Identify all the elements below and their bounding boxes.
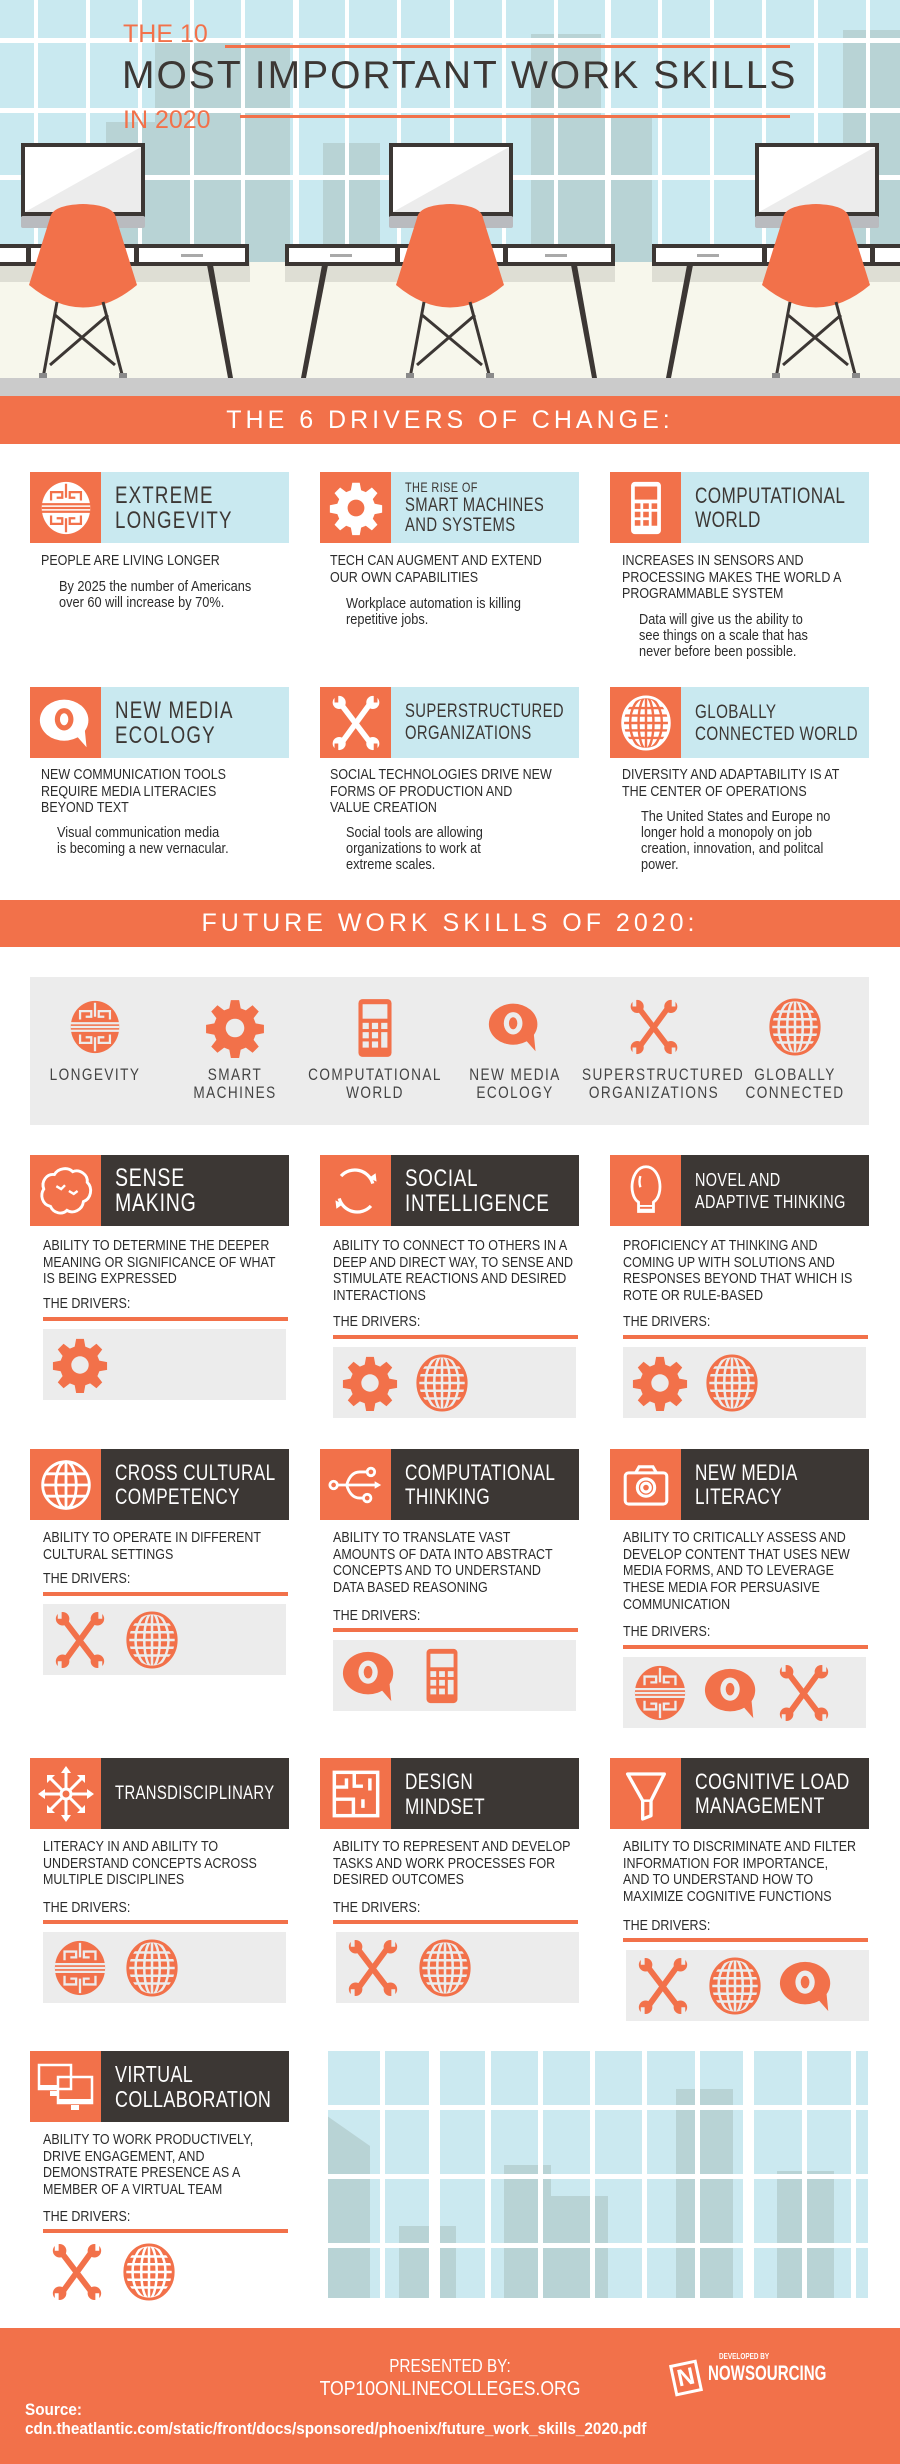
text: UNDERSTAND CONCEPTS ACROSS xyxy=(43,1856,257,1872)
driver card: globally connected world: GLOBALLY xyxy=(695,700,776,722)
icon: longevity xyxy=(70,1000,120,1054)
text: power. xyxy=(641,857,679,873)
skill: cross cultural competency: CROSS CULTURAL xyxy=(115,1460,276,1484)
text: DEVELOP CONTENT THAT USES NEW xyxy=(623,1547,850,1563)
skill: social intelligence: SOCIAL xyxy=(405,1164,478,1192)
text: THE DRIVERS: xyxy=(43,2209,130,2225)
title: THE 10 xyxy=(123,20,208,48)
text: new media ecology: REQUIRE MEDIA LITERACIES xyxy=(41,784,216,800)
text: THE DRIVERS: xyxy=(43,1571,130,1587)
text: THE DRIVERS: xyxy=(43,1296,130,1312)
text: organizations to work at xyxy=(346,841,481,857)
text: superstructured: VALUE CREATION xyxy=(330,800,437,816)
drivers: sense making xyxy=(43,1329,286,1400)
text: superstructured: SOCIAL TECHNOLOGIES DRIVE NEW xyxy=(330,767,552,783)
text: DESIRED OUTCOMES xyxy=(333,1872,464,1888)
icon: calculator xyxy=(358,999,392,1057)
text: new media ecology xyxy=(41,767,226,816)
logo: nowsourcing: DEVELOPED BY xyxy=(719,2352,769,2361)
text: repetitive jobs. xyxy=(346,612,428,628)
drivers: social intelligence xyxy=(333,1347,576,1418)
driver card: superstructured organizations: SUPERSTRUCTURED xyxy=(405,700,564,722)
skill: cognitive load management: MANAGEMENT xyxy=(695,1792,825,1818)
text: THE DRIVERS: xyxy=(333,1900,420,1916)
text: INTERACTIONS xyxy=(333,1288,426,1304)
text: globally connected xyxy=(622,767,840,800)
text: superstructured xyxy=(330,767,552,816)
drivers: design mindset xyxy=(336,1932,579,2003)
text: ABILITY TO CRITICALLY ASSESS AND xyxy=(623,1530,846,1546)
text: DEEP AND DIRECT WAY, TO SENSE AND xyxy=(333,1255,573,1271)
icon: globe xyxy=(769,998,821,1056)
skill: computational thinking xyxy=(320,1449,579,1520)
text: Data will give us the ability to xyxy=(639,612,803,628)
driver card: superstructured organizations xyxy=(320,687,579,758)
text: Workplace automation is killing xyxy=(346,596,521,612)
logo: nowsourcing xyxy=(669,2352,826,2396)
skill: new media literacy: LITERACY xyxy=(695,1484,782,1508)
text: ROTE OR RULE-BASED xyxy=(623,1288,763,1304)
text: ABILITY TO DETERMINE THE DEEPER xyxy=(43,1238,269,1254)
source: cdn.theatlantic.com/static/front/docs/sponsored/phoenix/future_work_skills_2020.pdf xyxy=(25,2419,647,2438)
window illustration xyxy=(328,2051,868,2298)
presented by: PRESENTED BY: xyxy=(389,2356,511,2376)
legend labels: SUPERSTRUCTURED xyxy=(582,1065,744,1084)
text: CONCEPTS AND TO UNDERSTAND xyxy=(333,1563,541,1579)
driver card: globally connected world: CONNECTED WORLD xyxy=(695,722,858,744)
text: ABILITY TO OPERATE IN DIFFERENT xyxy=(43,1530,261,1546)
skill: design mindset: MINDSET xyxy=(405,1794,485,1818)
driver card: new media ecology: ECOLOGY xyxy=(115,722,216,748)
text: computational world xyxy=(622,553,842,602)
text: over 60 will increase by 70%. xyxy=(59,595,224,611)
skill: design mindset: DESIGN xyxy=(405,1768,473,1794)
text: THE DRIVERS: xyxy=(333,1608,420,1624)
skill: transdisciplinary: TRANSDISCIPLINARY xyxy=(115,1782,275,1804)
source: Source: xyxy=(25,2400,82,2419)
text: longer hold a monopoly on job xyxy=(641,825,812,841)
text: CULTURAL SETTINGS xyxy=(43,1547,173,1563)
icon: tools xyxy=(630,1000,678,1054)
text: globally connected: DIVERSITY AND ADAPTABILITY IS AT xyxy=(622,767,839,783)
legend labels: GLOBALLY xyxy=(754,1065,836,1084)
drivers: computational thinking xyxy=(333,1640,576,1711)
text: THE DRIVERS: xyxy=(623,1918,710,1934)
legend labels: MACHINES xyxy=(193,1083,277,1102)
drivers: novel thinking xyxy=(623,1347,866,1418)
skill: transdisciplinary xyxy=(30,1758,289,1829)
header illustration xyxy=(0,0,900,396)
text: smart machines: OUR OWN CAPABILITIES xyxy=(330,570,478,586)
banner: future work skills xyxy=(0,900,900,947)
legend labels: COMPUTATIONAL xyxy=(308,1065,442,1084)
banner: drivers of change xyxy=(0,396,900,444)
source xyxy=(25,2400,647,2438)
logo: nowsourcing: N xyxy=(675,2363,697,2393)
text: LITERACY IN AND ABILITY TO xyxy=(43,1839,218,1855)
text: THE DRIVERS: xyxy=(333,1314,420,1330)
panel: driver legend xyxy=(30,977,869,1125)
text: THESE MEDIA FOR PERSUASIVE xyxy=(623,1580,820,1596)
banner: future work skills: FUTURE WORK SKILLS OF 2020: xyxy=(202,909,698,937)
skill: sense making xyxy=(30,1155,289,1226)
text: TASKS AND WORK PROCESSES FOR xyxy=(333,1856,555,1872)
text: extreme scales. xyxy=(346,857,435,873)
banner: drivers of change: THE 6 DRIVERS OF CHANGE: xyxy=(226,406,674,434)
drivers: transdisciplinary xyxy=(43,1932,286,2003)
text: computational world: INCREASES IN SENSORS AND xyxy=(622,553,804,569)
text: MULTIPLE DISCIPLINES xyxy=(43,1872,184,1888)
text: IS BEING EXPRESSED xyxy=(43,1271,177,1287)
driver card: new media ecology: NEW MEDIA xyxy=(115,696,234,724)
skill: virtual collaboration: VIRTUAL xyxy=(115,2060,193,2086)
icon: bubble xyxy=(488,1004,538,1052)
text: computational world: PROGRAMMABLE SYSTEM xyxy=(622,586,783,602)
text: COMING UP WITH SOLUTIONS AND xyxy=(623,1255,835,1271)
legend labels: WORLD xyxy=(346,1083,404,1102)
text: globally connected: THE CENTER OF OPERATIONS xyxy=(622,784,807,800)
driver card: extreme longevity: EXTREME xyxy=(115,482,214,508)
driver card: globally connected world xyxy=(610,687,869,758)
skill: sense making: MAKING xyxy=(115,1188,197,1216)
title xyxy=(122,20,797,134)
driver card: superstructured organizations: ORGANIZATIONS xyxy=(405,722,532,744)
skill: design mindset xyxy=(320,1758,579,1829)
text: THE DRIVERS: xyxy=(43,1900,130,1916)
footer: TOP10ONLINECOLLEGES.ORG xyxy=(320,2378,580,2400)
title: MOST IMPORTANT WORK SKILLS xyxy=(122,54,797,97)
legend labels: NEW MEDIA xyxy=(469,1065,561,1084)
footer xyxy=(0,2328,900,2464)
skill: computational thinking: THINKING xyxy=(405,1484,490,1508)
legend labels: LONGEVITY xyxy=(50,1065,140,1084)
skill: social intelligence xyxy=(320,1155,579,1226)
text: MAXIMIZE COGNITIVE FUNCTIONS xyxy=(623,1889,832,1905)
driver card: smart machines: SMART MACHINES xyxy=(405,495,544,516)
skill: virtual collaboration xyxy=(30,2051,289,2122)
text: ABILITY TO WORK PRODUCTIVELY, xyxy=(43,2132,253,2148)
skill: novel and adaptive thinking: ADAPTIVE THINKING xyxy=(695,1190,846,1212)
text: ABILITY TO TRANSLATE VAST xyxy=(333,1530,510,1546)
text: THE DRIVERS: xyxy=(623,1624,710,1640)
driver card: computational world xyxy=(610,472,869,543)
icon: gear xyxy=(206,1000,264,1058)
skill: cognitive load management: COGNITIVE LOAD xyxy=(695,1768,850,1794)
title: IN 2020 xyxy=(123,106,211,134)
driver card: computational world: COMPUTATIONAL xyxy=(695,482,845,508)
driver card: extreme longevity: LONGEVITY xyxy=(115,506,233,534)
legend labels xyxy=(50,1065,845,1102)
text: ABILITY TO CONNECT TO OTHERS IN A xyxy=(333,1238,567,1254)
text: creation, innovation, and politcal xyxy=(641,841,823,857)
text: DATA BASED REASONING xyxy=(333,1580,488,1596)
text: STIMULATE REACTIONS AND DESIRED xyxy=(333,1271,566,1287)
driver card: extreme longevity xyxy=(30,472,289,543)
text: By 2025 the number of Americans xyxy=(59,579,251,595)
text: superstructured: FORMS OF PRODUCTION AND xyxy=(330,784,512,800)
text: ABILITY TO DISCRIMINATE AND FILTER xyxy=(623,1839,856,1855)
drivers: cognitive load xyxy=(626,1950,869,2021)
legend labels: SMART xyxy=(208,1065,262,1084)
text: smart machines xyxy=(330,553,542,586)
text: MEMBER OF A VIRTUAL TEAM xyxy=(43,2182,222,2198)
text: AMOUNTS OF DATA INTO ABSTRACT xyxy=(333,1547,553,1563)
legend labels: ECOLOGY xyxy=(476,1083,554,1102)
driver card: smart machines: AND SYSTEMS xyxy=(405,515,516,536)
text: The United States and Europe no xyxy=(641,809,830,825)
text: RESPONSES BEYOND THAT WHICH IS xyxy=(623,1271,852,1287)
text: computational world: PROCESSING MAKES THE WORLD A xyxy=(622,570,841,586)
skill: new media literacy: NEW MEDIA xyxy=(695,1460,798,1484)
text: THE DRIVERS: xyxy=(623,1314,710,1330)
text: Visual communication media xyxy=(57,825,219,841)
driver card: smart machines xyxy=(320,472,579,543)
text: MEANING OR SIGNIFICANCE OF WHAT xyxy=(43,1255,276,1271)
skill: new media literacy xyxy=(610,1449,869,1520)
skill: cross cultural competency: COMPETENCY xyxy=(115,1484,240,1508)
skill: sense making: SENSE xyxy=(115,1164,185,1192)
text: AND TO UNDERSTAND HOW TO xyxy=(623,1872,813,1888)
driver card: smart machines: THE RISE OF xyxy=(405,479,478,495)
text: DEMONSTRATE PRESENCE AS A xyxy=(43,2165,240,2181)
skill: cross cultural competency xyxy=(30,1449,289,1520)
text: smart machines: TECH CAN AUGMENT AND EXTEND xyxy=(330,553,542,569)
text: COMMUNICATION xyxy=(623,1597,730,1613)
text: MEDIA FORMS, AND TO LEVERAGE xyxy=(623,1563,834,1579)
text: new media ecology: BEYOND TEXT xyxy=(41,800,129,816)
skill: cognitive load management xyxy=(610,1758,869,1829)
drivers: new media literacy xyxy=(623,1657,866,1728)
logo: nowsourcing: NOWSOURCING xyxy=(708,2362,826,2385)
skill: social intelligence: INTELLIGENCE xyxy=(405,1190,550,1216)
driver card: new media ecology xyxy=(30,687,289,758)
text: never before been possible. xyxy=(639,644,796,660)
drivers: virtual collaboration xyxy=(52,2244,175,2300)
skill: virtual collaboration: COLLABORATION xyxy=(115,2086,271,2112)
text: is becoming a new vernacular. xyxy=(57,841,229,857)
text: DRIVE ENGAGEMENT, AND xyxy=(43,2149,204,2165)
text: longevity: PEOPLE ARE LIVING LONGER xyxy=(41,553,220,569)
text: see things on a scale that has xyxy=(639,628,808,644)
text: Social tools are allowing xyxy=(346,825,483,841)
skill: computational thinking: COMPUTATIONAL xyxy=(405,1460,555,1484)
driver card: computational world: WORLD xyxy=(695,506,761,532)
skill: novel and adaptive thinking xyxy=(610,1155,869,1226)
text: PROFICIENCY AT THINKING AND xyxy=(623,1238,817,1254)
text: INFORMATION FOR IMPORTANCE, xyxy=(623,1856,828,1872)
text: new media ecology: NEW COMMUNICATION TOOLS xyxy=(41,767,226,783)
legend labels: CONNECTED xyxy=(745,1083,845,1102)
drivers: cross cultural xyxy=(43,1604,286,1675)
skill: novel and adaptive thinking: NOVEL AND xyxy=(695,1168,781,1190)
legend labels: ORGANIZATIONS xyxy=(589,1083,719,1102)
text: ABILITY TO REPRESENT AND DEVELOP xyxy=(333,1839,570,1855)
